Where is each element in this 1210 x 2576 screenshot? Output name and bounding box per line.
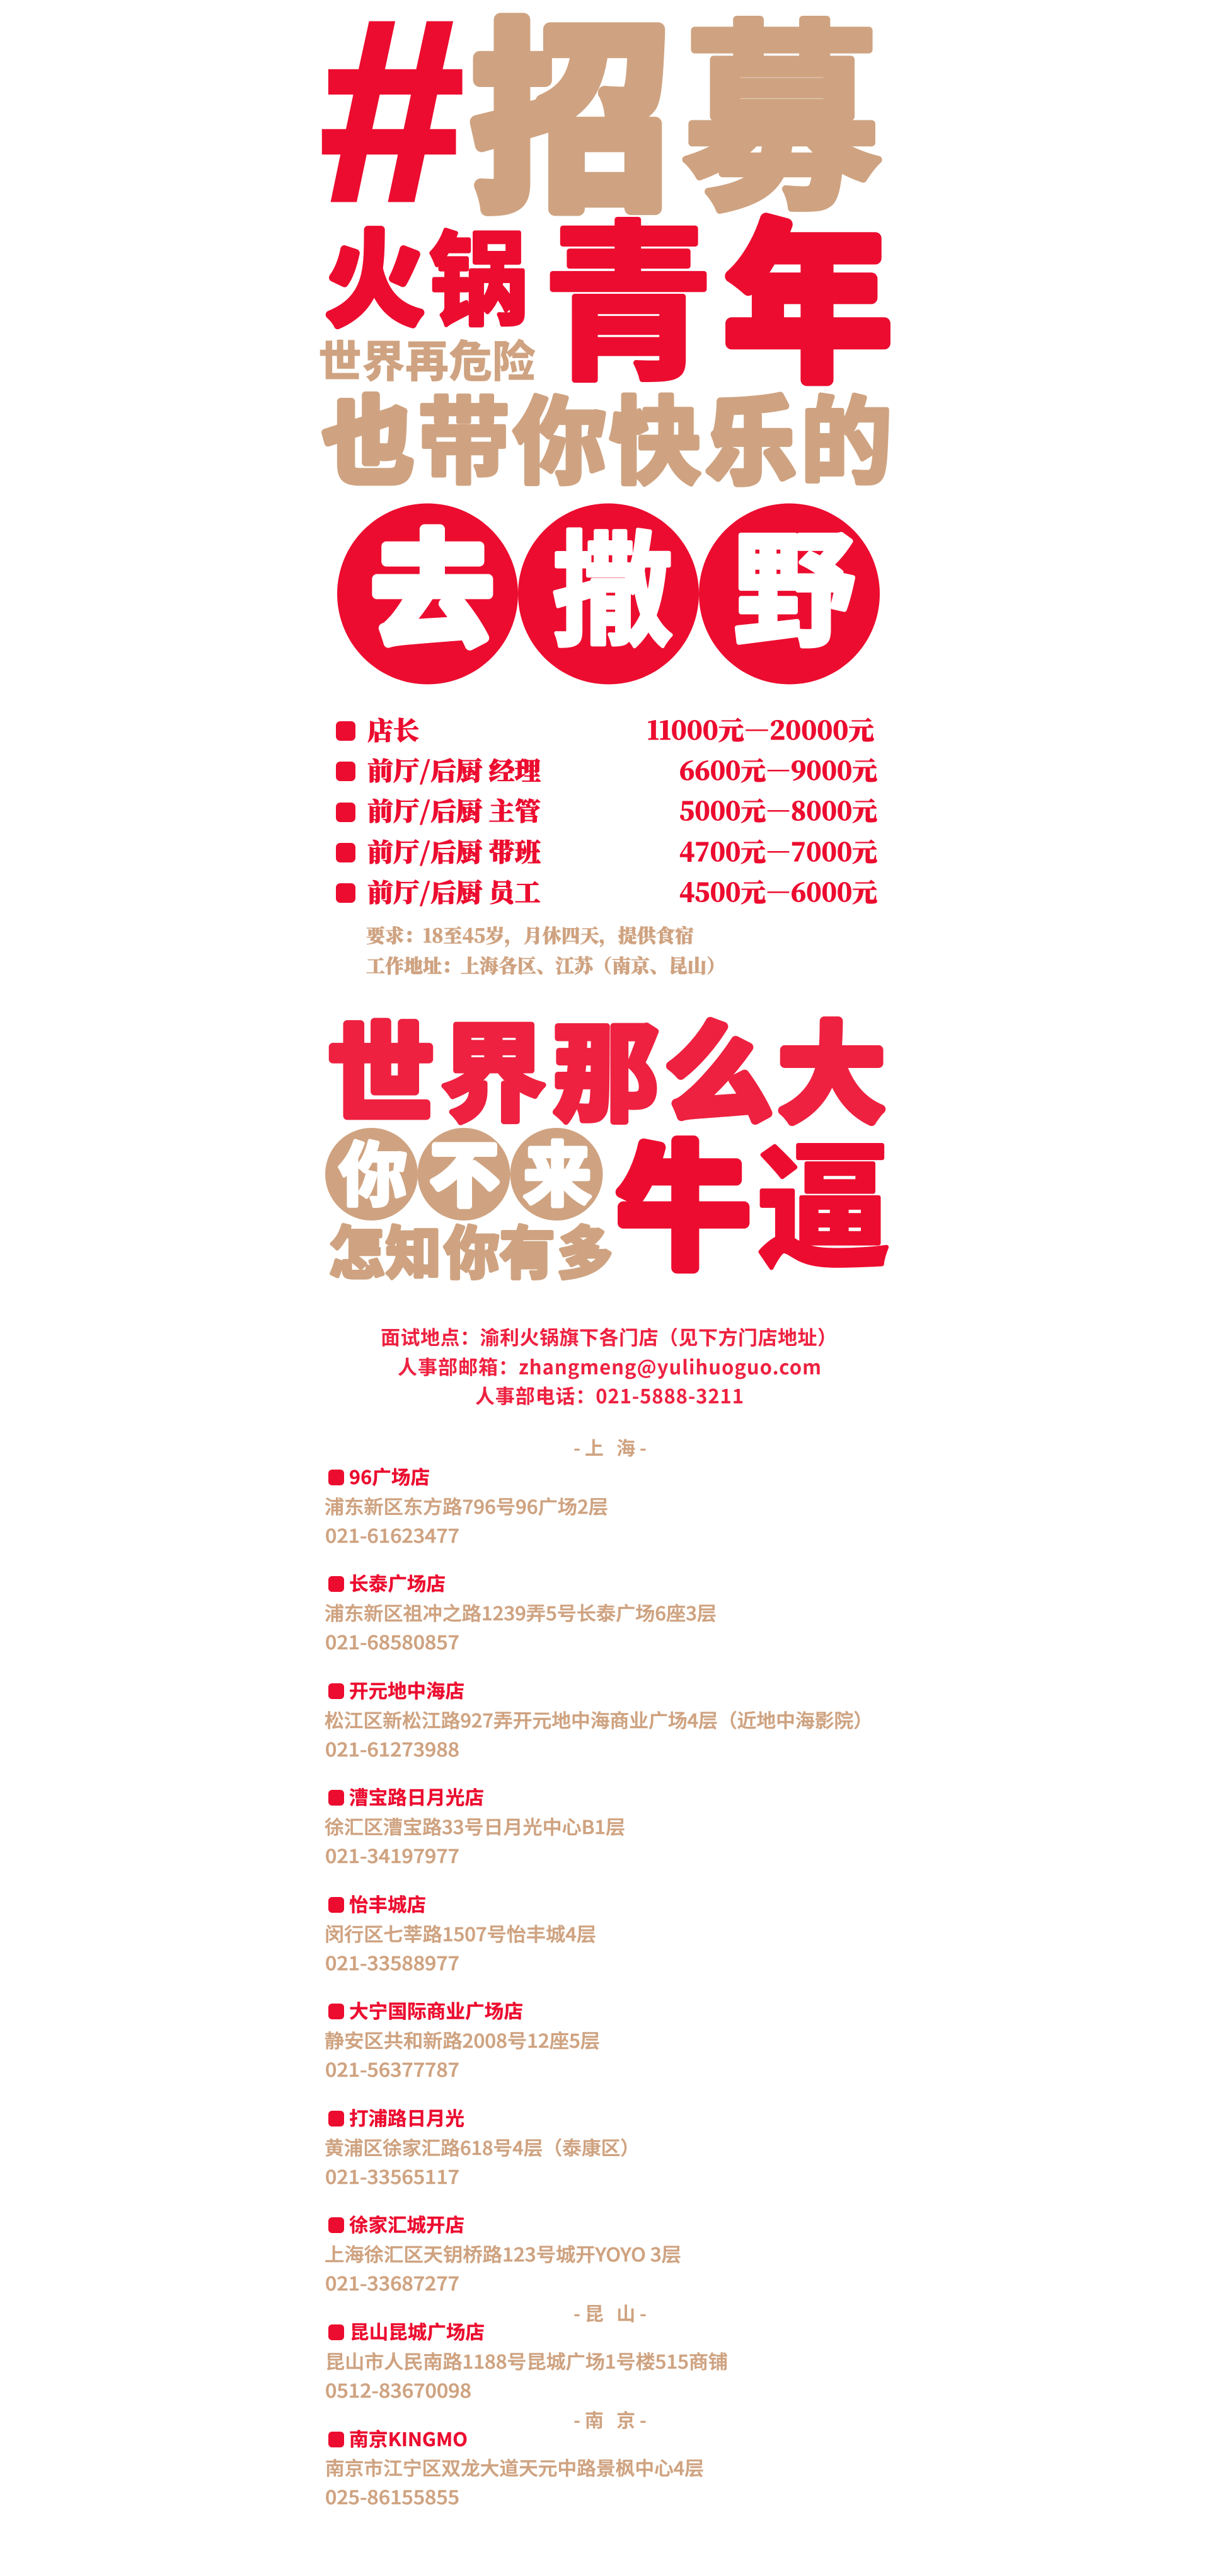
region heading: 上海: - 上 海 - [573,1433,647,1461]
store: 开元地中海店: 开元地中海店 [349,1676,464,1703]
store: 大宁国际商业广场店: 静安区共和新路2008号12座5层 [325,2026,600,2053]
region heading: 南京: - 南 京 - [573,2405,647,2433]
interview location: 面试地点：渝利火锅旗下各门店（见下方门店地址） [381,1322,837,1350]
job row: 员工: 4500元—6000元 [679,873,877,909]
store: 打浦路日月光: 黄浦区徐家汇路618号4层（泰康区） [325,2133,640,2161]
store: 漕宝路日月光店 [325,1782,625,1869]
store: 开元地中海店: 021-61273988 [325,1734,459,1762]
store: 96广场店: 96广场店 [349,1462,430,1490]
store: 大宁国际商业广场店 [325,1996,600,2082]
store: 南京KINGMO: 南京KINGMO [349,2424,468,2452]
subheading: 怎知你有多: 有 [500,1207,555,1290]
job row: 员工: 前厅/后厨 员工 [367,873,541,909]
headline: 青年: 年 [725,167,891,414]
headline: 也带你快乐的: 也 [323,366,413,503]
job row: 主管: 5000元—8000元 [679,792,877,828]
job row: 带班 [336,833,877,869]
requirements text: 要求：18至45岁，月休四天，提供食宿 [366,920,694,948]
headline: 牛逼 [618,1100,890,1296]
headline: 牛逼: 逼 [757,1100,890,1295]
job row: 主管 [336,792,877,828]
circles: 你不来: 你 [339,1120,407,1220]
contact block [381,1322,837,1409]
store: 怡丰城店 [325,1889,596,1976]
store: 怡丰城店: 021-33588977 [325,1948,459,1976]
circles: 你不来 [325,1120,602,1221]
store: 开元地中海店 [325,1676,873,1762]
headline: 也带你快乐的: 快 [610,366,700,503]
store: 昆山昆城广场店: 0512-83670098 [325,2376,471,2403]
headline: 世界那么大 [328,988,884,1143]
job row: 经理: 前厅/后厨 经理 [367,751,541,787]
headline: 世界那么大: 那 [553,988,659,1143]
store: 漕宝路日月光店: 漕宝路日月光店 [349,1782,484,1810]
job row: 店长: 店长 [367,711,419,747]
store: 大宁国际商业广场店: 大宁国际商业广场店 [349,1996,523,2024]
store: 南京KINGMO: 025-86155855 [325,2482,459,2510]
store: 漕宝路日月光店: 徐汇区漕宝路33号日月光中心B1层 [325,1812,625,1840]
job row: 带班: 前厅/后厨 带班 [367,833,541,869]
circles: 你不来: 来 [524,1120,591,1220]
work address text: 工作地址：上海各区、江苏（南京、昆山） [366,951,725,978]
recruitment phone: 人事部电话：021-5888-3211 [475,1381,744,1409]
headline: 也带你快乐的: 你 [514,366,606,502]
subheading: 怎知你有多: 怎 [329,1207,384,1290]
job row: 店长: 11000元—20000元 [647,711,874,747]
headline: 也带你快乐的 [323,366,892,503]
store: 打浦路日月光 [325,2103,640,2190]
region heading: 昆山: - 昆 山 - [573,2299,647,2326]
job row: 带班: 4700元—7000元 [679,833,877,869]
headline: 也带你快乐的: 带 [418,366,510,502]
job row: 员工 [336,873,877,909]
subheading: 怎知你有多: 多 [557,1207,613,1290]
subheading: 怎知你有多: 你 [444,1207,499,1290]
headline: 火锅 [326,197,528,345]
store: 96广场店: 021-61623477 [325,1521,459,1548]
store: 昆山昆城广场店: 昆山市人民南路1188号昆城广场1号楼515商铺 [325,2347,728,2374]
headline: 世界那么大: 大 [779,988,884,1143]
job row: 主管: 前厅/后厨 主管 [367,792,541,828]
store: 大宁国际商业广场店: 021-56377787 [325,2055,459,2082]
subheading: 怎知你有多 [329,1207,613,1290]
job row: 经理 [336,751,877,787]
store: 打浦路日月光: 打浦路日月光 [349,2103,464,2131]
circles: 去撒野 [337,492,880,685]
circle 野: 野 [734,492,855,671]
store: 96广场店: 浦东新区东方路796号96广场2层 [325,1492,608,1519]
store: 徐家汇城开店: 徐家汇城开店 [349,2210,464,2237]
headline: 牛逼: 牛 [618,1100,749,1296]
circles: 你不来: 不 [430,1120,498,1220]
job and salary list [336,711,877,909]
store: 漕宝路日月光店: 021-34197977 [325,1841,459,1869]
headline: 也带你快乐的: 乐 [706,366,795,502]
store: 96广场店 [325,1462,608,1548]
store: 徐家汇城开店 [325,2210,681,2296]
store: 长泰广场店: 长泰广场店 [349,1569,446,1596]
store: 昆山昆城广场店 [325,2317,728,2403]
circle 去: 去 [371,492,493,671]
job row: 店长 [336,711,874,747]
headline: 世界那么大: 世 [328,988,434,1143]
headline: 青年: 青 [543,167,713,414]
store: 开元地中海店: 松江区新松江路927弄开元地中海商业广场4层（近地中海影院） [325,1705,873,1733]
store: 打浦路日月光: 021-33565117 [325,2162,459,2190]
subheading: 怎知你有多: 知 [386,1207,441,1290]
headline: 青年 [543,167,891,414]
headline: 也带你快乐的: 的 [801,366,892,503]
store: 怡丰城店: 闵行区七莘路1507号怡丰城4层 [325,1919,596,1947]
headline: #招募 [321,0,882,253]
store: 南京KINGMO [325,2424,704,2510]
store: 长泰广场店 [325,1569,717,1655]
headline: 世界那么大: 界 [441,988,546,1143]
subheading: 世界再危险: 世界再危险 [318,327,536,390]
store: 徐家汇城开店: 上海徐汇区天钥桥路123号城开YOYO 3层 [325,2239,681,2267]
store: 昆山昆城广场店: 昆山昆城广场店 [350,2317,485,2345]
recruitment email: 人事部邮箱：zhangmeng@yulihuoguo.com [398,1352,821,1380]
store: 徐家汇城开店: 021-33687277 [325,2268,459,2296]
headline: 火锅: 火 [326,197,423,345]
headline: 世界那么大: 么 [666,988,771,1143]
circle 撒 [518,492,699,685]
circle 撒: 撒 [552,492,674,671]
store: 南京KINGMO: 南京市江宁区双龙大道天元中路景枫中心4层 [325,2453,704,2481]
store: 怡丰城店: 怡丰城店 [349,1889,426,1917]
store: 长泰广场店: 浦东新区祖冲之路1239弄5号长泰广场6座3层 [325,1598,717,1626]
headline: 火锅: 锅 [429,198,528,345]
circle 去 [337,492,518,685]
store: 长泰广场店: 021-68580857 [325,1627,459,1655]
circle 野 [699,492,880,685]
job row: 经理: 6600元—9000元 [679,751,877,787]
